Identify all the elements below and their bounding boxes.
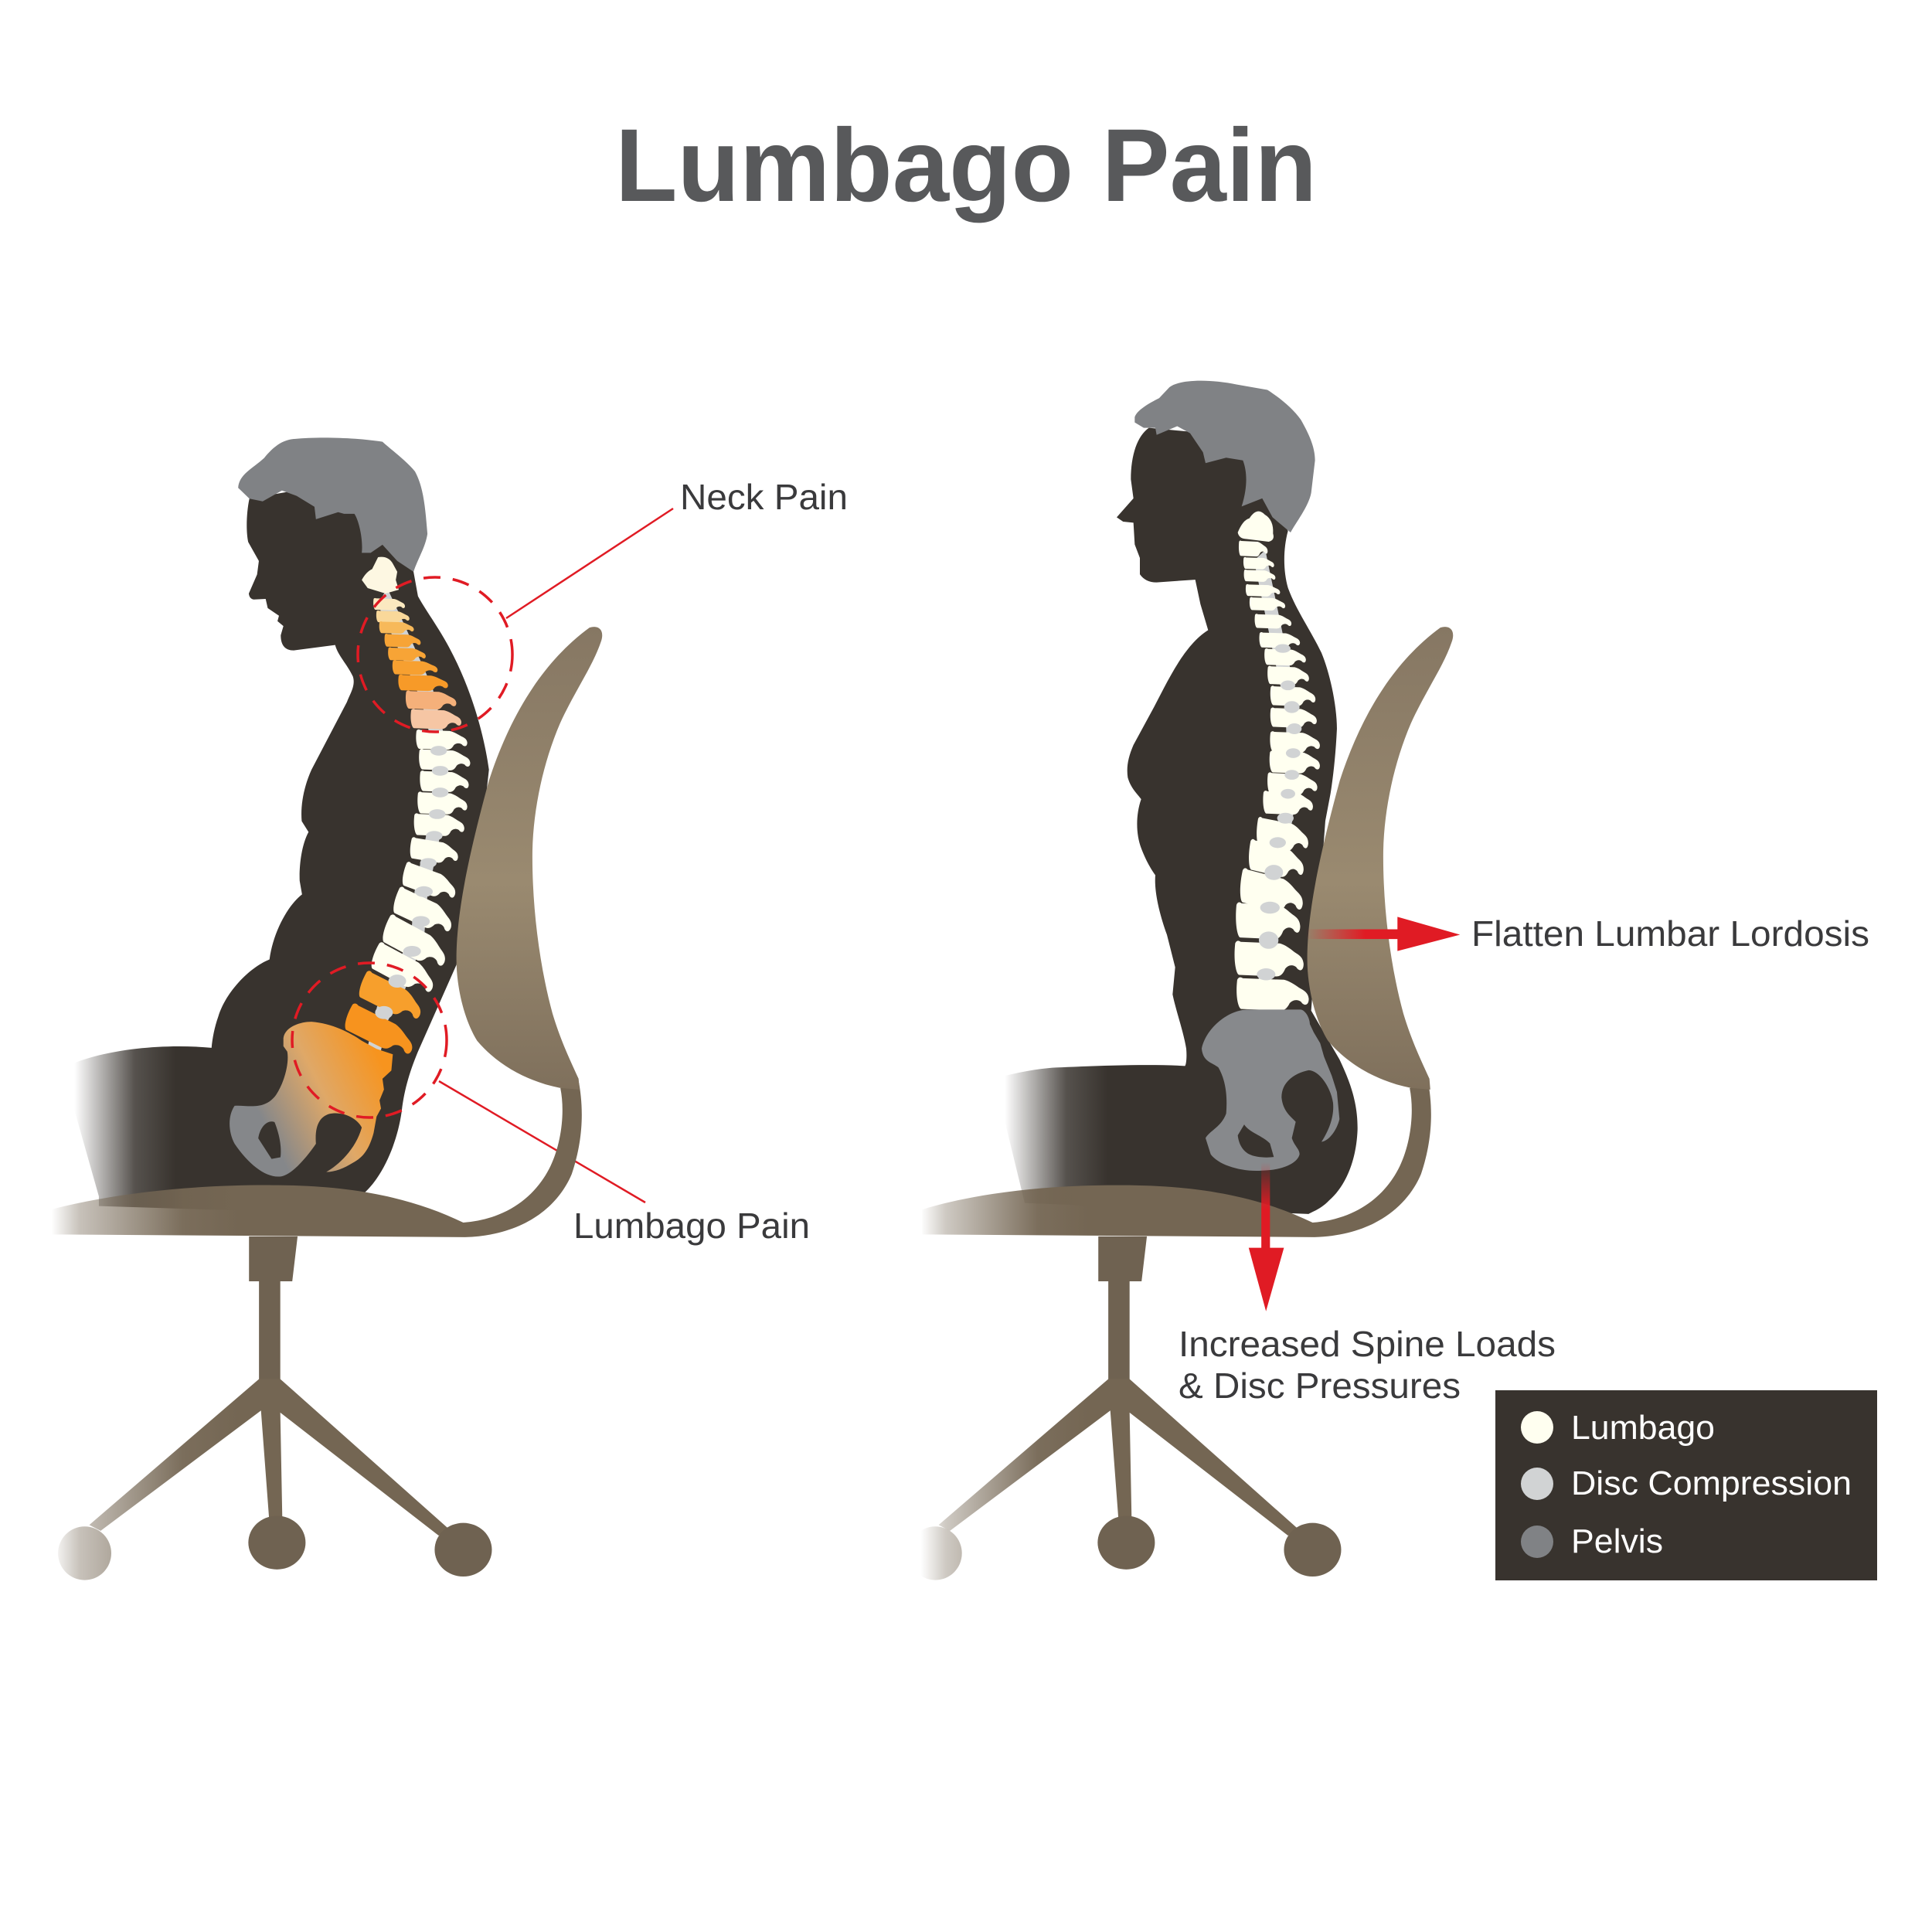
arrow: increased spine loads: [1249, 1158, 1284, 1311]
right pelvis: [1202, 1009, 1339, 1171]
top vertebra: [362, 557, 399, 594]
right figure: hair: [1134, 381, 1315, 532]
left figure: spine: [230, 557, 470, 1177]
legend label: pelvis: Pelvis: [1571, 1522, 1663, 1560]
legend swatch: disc compression: [1521, 1468, 1553, 1500]
arrow: flatten lumbar lordosis: [1306, 917, 1460, 951]
discs: [1260, 556, 1293, 1008]
left figure: hair: [238, 437, 427, 572]
label: increased spine loads: [1179, 1324, 1556, 1406]
disc highlights: [1257, 645, 1301, 980]
lumbago pain dashed circle: [292, 963, 447, 1117]
left chair: seat and arm: [51, 1080, 582, 1237]
right chair: right wheel: [1284, 1523, 1341, 1577]
label: flatten lumbar lordosis: Flatten Lumbar Lordosis: [1471, 913, 1869, 954]
right figure: body silhouette: [1005, 428, 1358, 1214]
left chair: left wheel: [58, 1526, 111, 1580]
right chair: base legs: [939, 1379, 1298, 1536]
top vertebra: [1238, 512, 1274, 542]
legend label: disc compression: Disc Compression: [1571, 1464, 1852, 1502]
leader line: lumbago pain: [439, 1081, 645, 1202]
disc highlights: [375, 746, 448, 1019]
legend swatch: pelvis: [1521, 1526, 1553, 1558]
label: increased spine loads: & Disc Pressures: [1179, 1366, 1461, 1406]
left chair: middle wheel: [248, 1515, 305, 1570]
discs: [373, 596, 441, 1052]
vertebrae: [1235, 540, 1320, 1011]
vertebrae: [342, 598, 470, 1060]
left chair: right wheel: [434, 1523, 492, 1577]
label: increased spine loads: Increased Spine Loads: [1179, 1324, 1556, 1364]
pelvis opening: [258, 1121, 281, 1159]
leader line: neck pain: [506, 509, 673, 618]
legend swatch: lumbago: [1521, 1411, 1553, 1444]
legend label: lumbago: Lumbago: [1571, 1409, 1715, 1447]
right chair: column: [1098, 1236, 1147, 1379]
left chair: [51, 1080, 582, 1580]
legend background: [1495, 1390, 1877, 1580]
right chair: seat and arm: [922, 1080, 1431, 1237]
title: Lumbago Pain: [615, 108, 1317, 223]
right chair: backrest: [1308, 627, 1453, 1090]
left chair: base legs: [90, 1379, 449, 1536]
neck pain dashed circle: [358, 577, 512, 732]
label: lumbago pain: Lumbago Pain: [573, 1206, 810, 1246]
legend: [1495, 1390, 1877, 1580]
right chair: left wheel: [909, 1526, 962, 1580]
right figure: spine: [1202, 512, 1339, 1171]
right chair: [909, 1080, 1431, 1580]
right chair: middle wheel: [1097, 1515, 1155, 1570]
left chair: column: [249, 1236, 298, 1379]
left pelvis: [230, 1022, 393, 1177]
pelvis opening: [1238, 1124, 1274, 1158]
left chair: backrest: [457, 627, 602, 1090]
label: neck pain: Neck Pain: [680, 477, 848, 517]
left figure: body silhouette: [74, 482, 489, 1214]
